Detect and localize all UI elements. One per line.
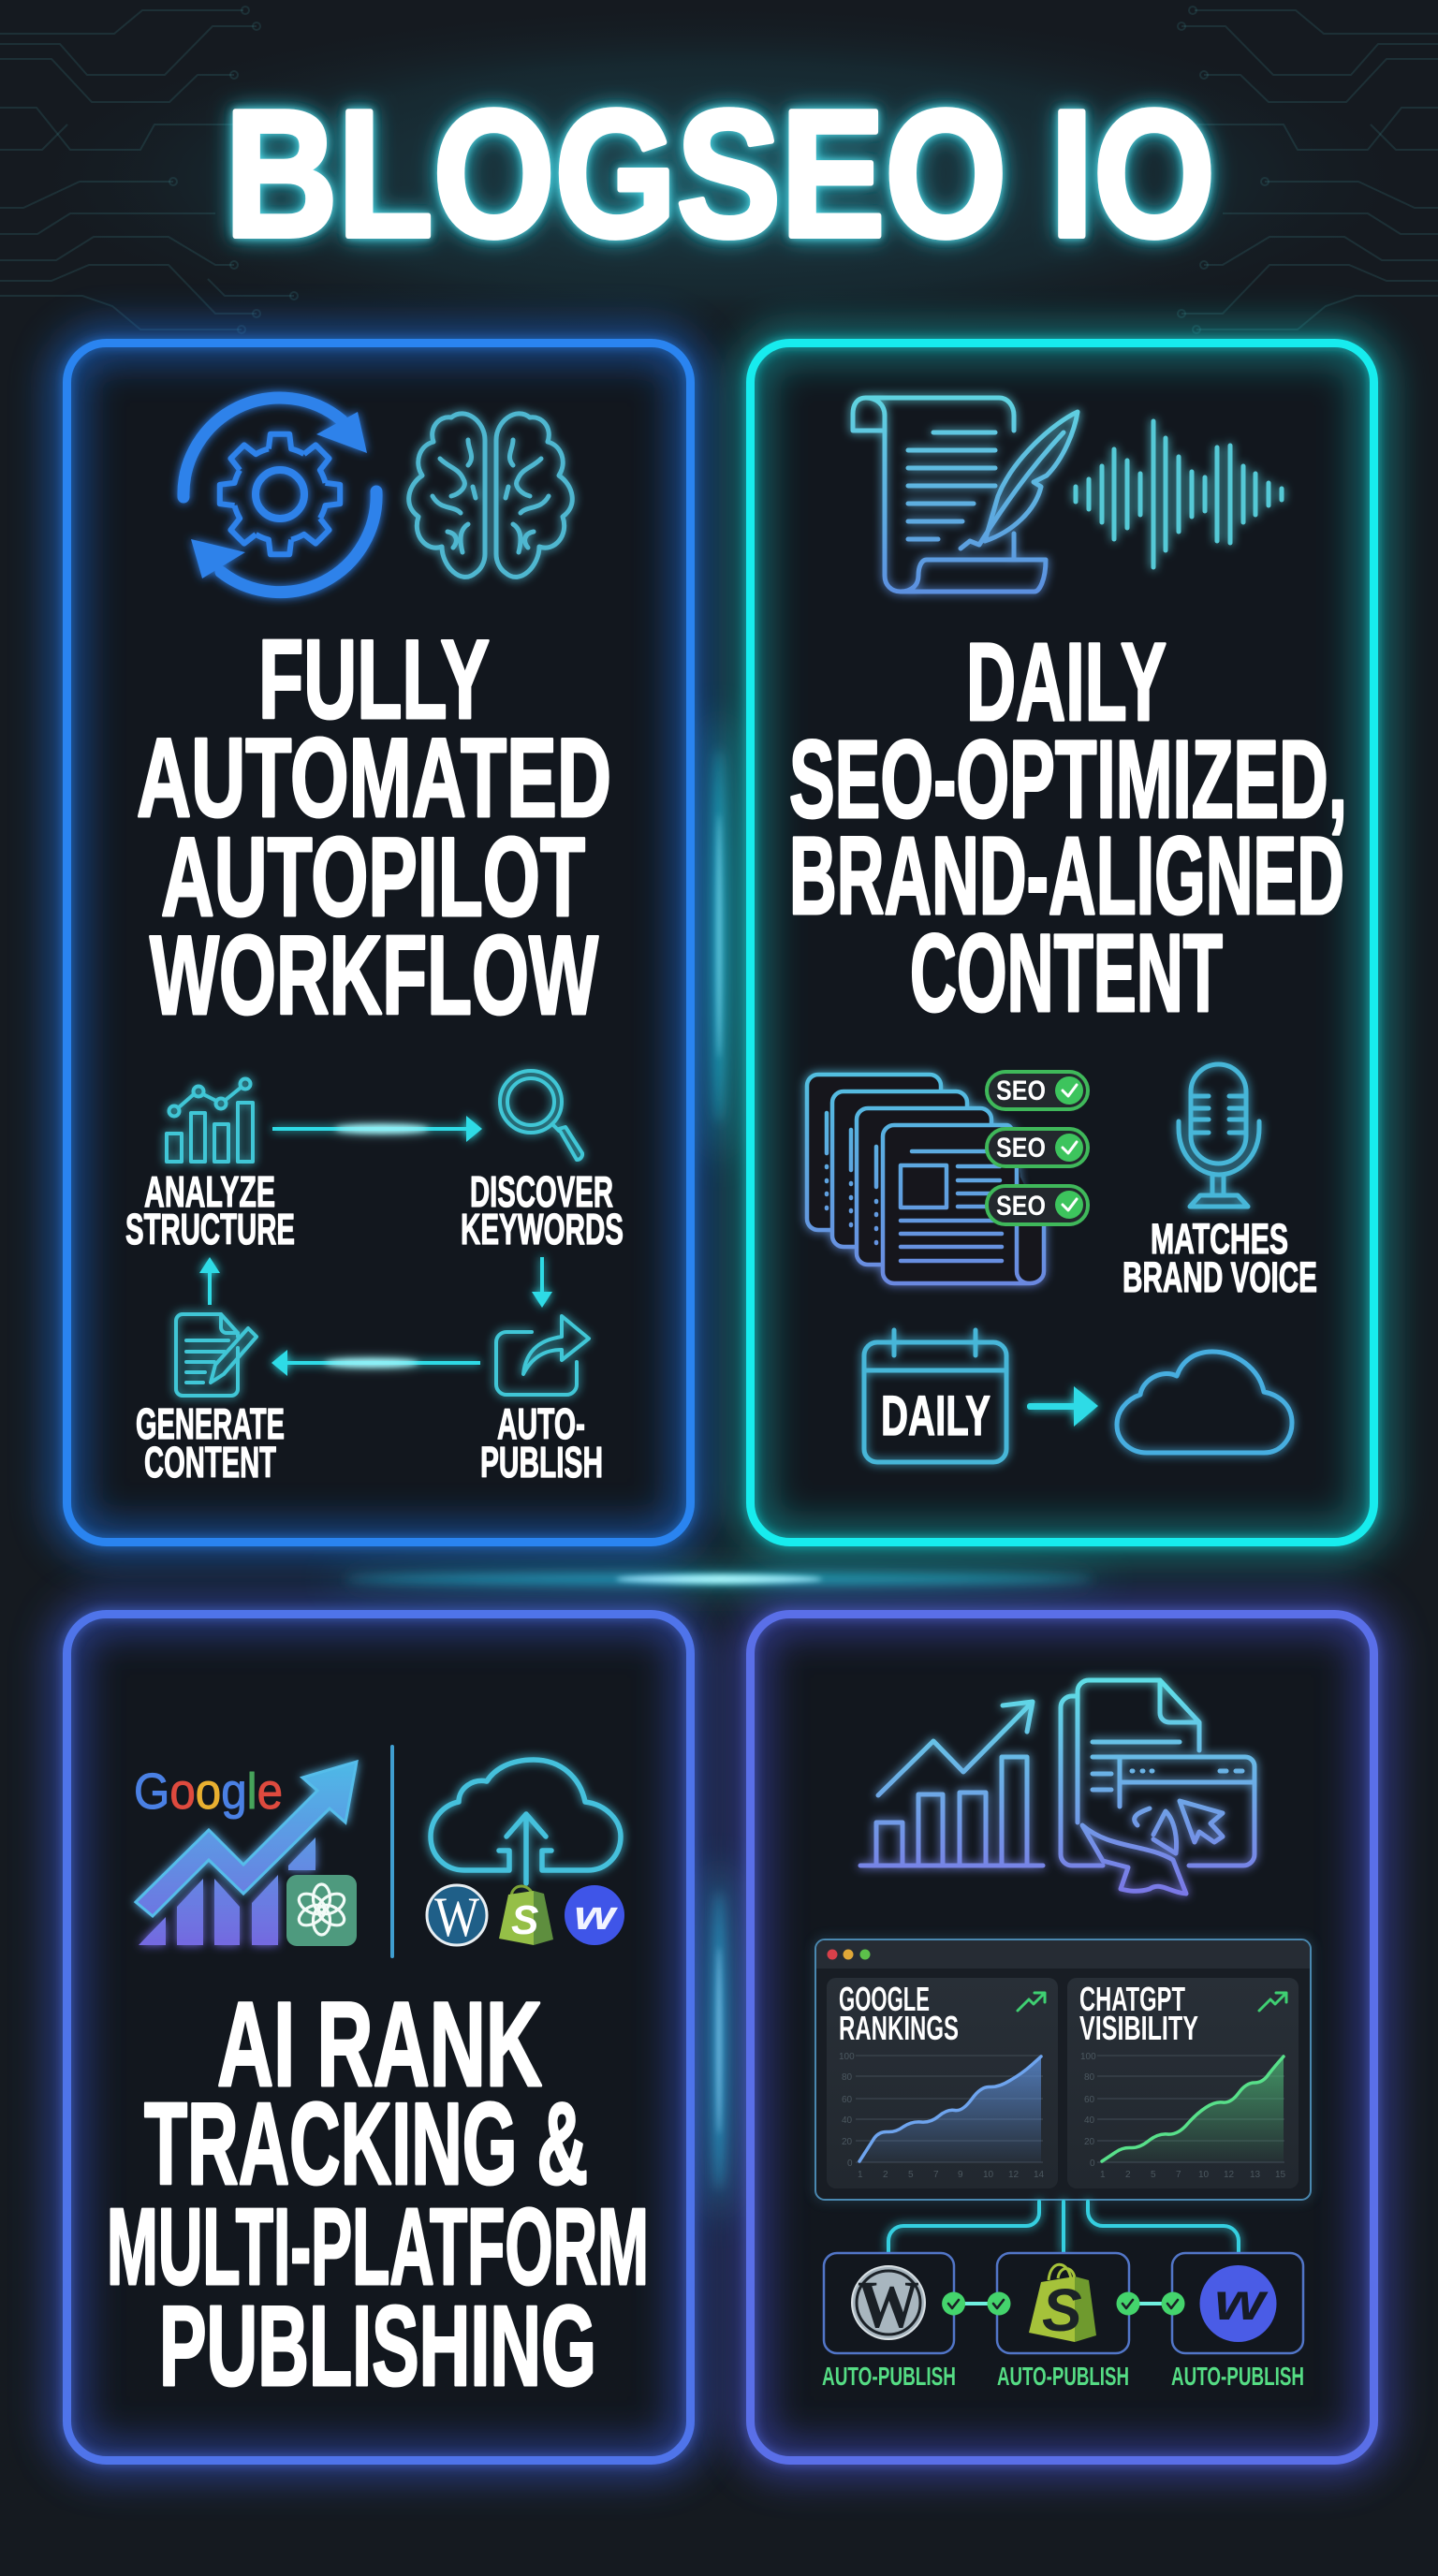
chart card: chatgpt visibility: 100 [1080, 2052, 1096, 2062]
heading: ai rank tracking multi-platform publishing [107, 1978, 649, 2409]
arrow: analyze to discover [272, 1116, 482, 1142]
chart card: chatgpt visibility: 7 [1176, 2170, 1181, 2180]
chart card: google rankings: RANKINGS [839, 2009, 959, 2047]
chart card: chatgpt visibility: 40 [1084, 2115, 1095, 2126]
seo badge 2 [987, 1129, 1088, 1166]
logo: shopify small: S [511, 1897, 538, 1943]
heading: ai rank tracking multi-platform publishing: TRACKING & [144, 2080, 588, 2209]
heading: ai rank tracking multi-platform publishing: PUBLISHING [159, 2282, 596, 2409]
label: matches brand voice [1123, 1215, 1317, 1301]
panel: ai rank tracking and multi-platform publishing [67, 1614, 691, 2460]
logo: shopify small [499, 1886, 553, 1945]
icon: auto-publish share [496, 1316, 589, 1395]
label: generate content: CONTENT [144, 1438, 276, 1486]
connector glow: lower vertical [704, 1863, 734, 2218]
dashboard window [815, 1939, 1311, 2200]
label: daily on calendar: DAILY [881, 1384, 990, 1447]
check connectors [942, 2291, 1185, 2316]
label: discover keywords: DISCOVER [470, 1167, 613, 1216]
arrow: calendar to cloud [1027, 1386, 1098, 1427]
icon: scroll with quill [853, 398, 1078, 592]
label: discover keywords: KEYWORDS [461, 1205, 624, 1253]
heading: daily seo-optimized brand-aligned content: CONTENT [910, 912, 1223, 1035]
chart card: google rankings: 2 [883, 2170, 888, 2180]
icon: growth bar chart [860, 1702, 1043, 1866]
icon: microphone [1179, 1064, 1259, 1207]
panel 4 frame [751, 1614, 1374, 2460]
label: auto-publish [480, 1399, 603, 1486]
seo badge 2: SEO [996, 1133, 1046, 1164]
label: generate content [136, 1399, 285, 1486]
chart card: chatgpt visibility: 12 [1224, 2170, 1235, 2180]
logo: webflow small: w [574, 1893, 619, 1939]
heading: daily seo-optimized brand-aligned content: DAILY [966, 621, 1167, 744]
label: generate content: GENERATE [136, 1399, 285, 1448]
chart card: google rankings: 14 [1034, 2170, 1045, 2180]
circuit pattern right [1178, 7, 1438, 333]
chart card: google rankings: 12 [1008, 2170, 1020, 2180]
panel 2 frame [751, 343, 1374, 1543]
chart card: chatgpt visibility [1067, 1978, 1299, 2188]
connector glow: upper vertical [704, 711, 734, 1161]
heading: ai rank tracking multi-platform publishing: MULTI-PLATFORM [107, 2186, 649, 2307]
heading: fully automated autopilot workflow: AUTOPILOT [161, 814, 585, 940]
panel 1 frame [67, 343, 691, 1543]
panel: fully automated autopilot workflow [67, 343, 691, 1543]
chart card: google rankings [827, 1978, 1058, 2188]
chart card: google rankings: 10 [983, 2170, 994, 2180]
label: analyze structure [125, 1167, 295, 1253]
platform box: shopify [997, 2253, 1129, 2353]
label: discover keywords [461, 1167, 624, 1253]
platform box: wordpress [824, 2253, 954, 2353]
heading: fully automated autopilot workflow: WORKFLOW [150, 913, 598, 1038]
chart card: google rankings: 40 [842, 2115, 853, 2126]
chart card: chatgpt visibility: 1 [1100, 2170, 1106, 2180]
heading: daily seo-optimized brand-aligned content [789, 621, 1347, 1035]
arrow: publish to generate [271, 1350, 480, 1376]
labels: auto-publish: AUTO-PUBLISH [1171, 2362, 1304, 2391]
icon: document with pencil [176, 1314, 257, 1396]
logo: google wordmark: Google [134, 1764, 283, 1820]
icon: document browser and cursor [1061, 1680, 1255, 1894]
chart card: chatgpt visibility: 60 [1084, 2095, 1095, 2105]
heading: fully automated autopilot workflow [137, 617, 611, 1038]
chart card: chatgpt visibility: 10 [1198, 2170, 1210, 2180]
seo badge 1: SEO [996, 1076, 1046, 1106]
label: matches brand voice: MATCHES [1151, 1215, 1288, 1263]
chart card: google rankings: 100 [839, 2052, 855, 2062]
chart: rising arrow with bars [136, 1762, 357, 1945]
chart card: google rankings: GOOGLE [839, 1980, 930, 2018]
chart card: chatgpt visibility: 2 [1125, 2170, 1131, 2180]
chart card: google rankings: 1 [858, 2170, 863, 2180]
icon: calendar [864, 1330, 1006, 1462]
chart card: google rankings: 80 [842, 2072, 853, 2083]
seo badge 3: SEO [996, 1191, 1046, 1222]
chart card: chatgpt visibility: 0 [1090, 2159, 1095, 2169]
chart card: chatgpt visibility: CHATGPT [1079, 1980, 1185, 2018]
title glow backdrop [7, 0, 1431, 356]
chart card: chatgpt visibility: 20 [1084, 2137, 1095, 2147]
platform box: webflow: w [1214, 2272, 1269, 2331]
icon: magnifier [500, 1071, 582, 1160]
icon: chatgpt tile [286, 1875, 357, 1946]
arrow: generate to analyze [199, 1257, 220, 1305]
heading: fully automated autopilot workflow: AUTOMATED [137, 715, 611, 841]
chart card: chatgpt visibility: 13 [1250, 2170, 1261, 2180]
icon: gear with cycle arrows [183, 398, 376, 593]
divider [390, 1745, 394, 1958]
chart card: google rankings: 0 [847, 2159, 853, 2169]
title: BLOGSEO IO [225, 72, 1215, 274]
logo: wordpress small: W [434, 1886, 479, 1948]
chart card: google rankings: 20 [842, 2137, 853, 2147]
label: matches brand voice: BRAND VOICE [1123, 1253, 1317, 1301]
icon: document stack [807, 1075, 1044, 1283]
icon: cloud upload [431, 1760, 621, 1883]
seo badge 3 [987, 1186, 1088, 1224]
heading: ai rank tracking multi-platform publishing: AI RANK [217, 1978, 542, 2112]
label: analyze structure: STRUCTURE [125, 1205, 295, 1253]
chart card: chatgpt visibility: 80 [1084, 2072, 1095, 2083]
panel 3 frame [67, 1614, 691, 2460]
platform box: wordpress: W [858, 2267, 919, 2342]
label: auto-publish: PUBLISH [480, 1438, 603, 1486]
labels: auto-publish: AUTO-PUBLISH [997, 2362, 1129, 2391]
icon: sound waveform [1076, 421, 1282, 567]
chart card: google rankings: 60 [842, 2095, 853, 2105]
heading: fully automated autopilot workflow: FULLY [258, 617, 490, 742]
icon: brain [409, 414, 572, 577]
icon: cloud [1117, 1352, 1292, 1453]
label: auto-publish: AUTO- [497, 1399, 585, 1448]
label: analyze structure: ANALYZE [144, 1167, 275, 1216]
panel: daily seo-optimized brand-aligned content [751, 343, 1374, 1543]
platform box: shopify: S [1042, 2276, 1082, 2344]
icon: analytics chart [167, 1078, 253, 1162]
circuit pattern left [0, 7, 298, 333]
chart card: google rankings: 5 [908, 2170, 914, 2180]
seo badge 1 [987, 1072, 1088, 1109]
panel: rankings dashboard and publishing [751, 1614, 1374, 2460]
chart card: google rankings: 7 [933, 2170, 939, 2180]
chart card: chatgpt visibility: 5 [1151, 2170, 1156, 2180]
connector glow: horizontal [326, 1570, 1112, 1588]
arrow: discover to publish [532, 1257, 552, 1308]
labels: auto-publish: AUTO-PUBLISH [822, 2362, 956, 2391]
chart card: chatgpt visibility: 15 [1275, 2170, 1286, 2180]
platform box: webflow [1172, 2253, 1303, 2353]
logo: webflow small [565, 1885, 624, 1945]
connectors: dashboard to platforms [888, 2202, 1239, 2252]
chart card: google rankings: 9 [958, 2170, 963, 2180]
labels: auto-publish [822, 2362, 1304, 2391]
chart card: chatgpt visibility: VISIBILITY [1079, 2009, 1198, 2047]
